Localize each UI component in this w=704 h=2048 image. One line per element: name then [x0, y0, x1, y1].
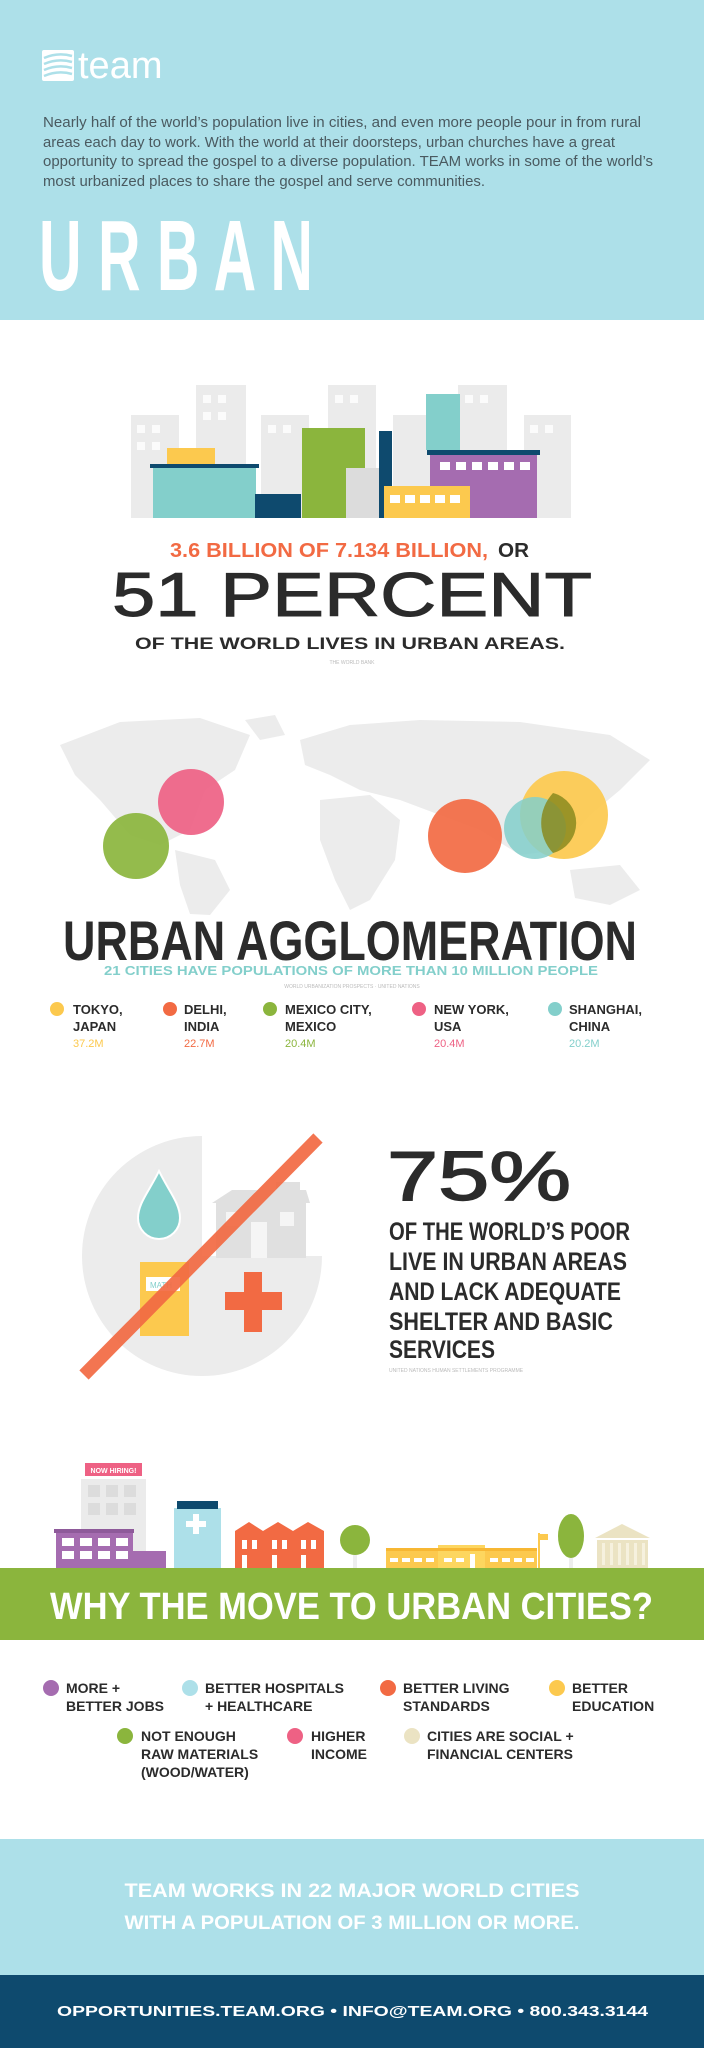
legend: largest cities: 20.4M	[434, 1038, 465, 1050]
legend: largest cities: TOKYO,	[73, 1002, 123, 1017]
footer contact	[0, 1975, 704, 2048]
slash	[84, 1138, 318, 1375]
icon: medical cross	[225, 1272, 282, 1332]
stat: 75 percent: AND LACK ADEQUATE	[389, 1278, 621, 1306]
stat: 75 percent: UNITED NATIONS HUMAN SETTLEMENTS PROGRAMME	[389, 1368, 524, 1374]
icon: book: MATH	[150, 1281, 172, 1290]
legend: reasons: RAW MATERIALS	[141, 1746, 258, 1762]
hospital	[174, 1508, 221, 1568]
legend: reasons: BETTER LIVING	[403, 1680, 510, 1696]
legend: reasons: HIGHER	[311, 1728, 365, 1744]
sign: now hiring	[85, 1463, 142, 1476]
houses	[235, 1522, 324, 1568]
legend: largest cities: USA	[434, 1019, 462, 1034]
stat: 3.6 billion headline	[112, 540, 592, 666]
legend: reasons: STANDARDS	[403, 1698, 490, 1714]
legend: reasons: BETTER JOBS	[66, 1698, 164, 1714]
icon: water drop	[138, 1171, 180, 1239]
stat: 75 percent: LIVE IN URBAN AREAS	[389, 1248, 627, 1276]
legend: largest cities: MEXICO CITY,	[285, 1002, 372, 1017]
footer contact: OPPORTUNITIES.TEAM.ORG • INFO@TEAM.ORG • 800.343.3144	[57, 2003, 649, 2020]
stat: 75 percent: 75%	[387, 1137, 571, 1215]
stat: 75 percent: SHELTER AND BASIC	[389, 1308, 613, 1336]
logo: team	[78, 45, 162, 87]
world map with city circles	[60, 715, 650, 915]
stat: 3.6 billion headline: 3.6 BILLION OF 7.134 BILLION,	[170, 540, 488, 562]
legend: largest cities: SHANGHAI,	[569, 1002, 642, 1017]
heading: urban agglomeration: 21 CITIES HAVE POPULATIONS OF MORE THAN 10 MILLION PEOPLE	[104, 963, 598, 978]
callout band	[0, 1839, 704, 1975]
intro paragraph	[43, 115, 653, 190]
title URBAN: U R B A N	[39, 200, 313, 312]
legend: reasons: MORE +	[66, 1680, 120, 1696]
legend: reasons	[43, 1680, 654, 1780]
stat: 75 percent: SERVICES	[389, 1336, 495, 1364]
icon: book	[140, 1262, 189, 1336]
intro paragraph: areas each day to work. With the world at their doorsteps, urban churches have a great	[43, 135, 615, 151]
legend: reasons: BETTER HOSPITALS	[205, 1680, 344, 1696]
stat: 75 percent	[387, 1137, 630, 1374]
legend: reasons: NOT ENOUGH	[141, 1728, 236, 1744]
callout band: WITH A POPULATION OF 3 MILLION OR MORE.	[124, 1913, 580, 1934]
icon: house	[212, 1182, 310, 1258]
legend: largest cities: DELHI,	[184, 1002, 227, 1017]
legend: largest cities: INDIA	[184, 1019, 220, 1034]
legend: reasons: FINANCIAL CENTERS	[427, 1746, 573, 1762]
header panel	[0, 0, 704, 320]
stat: 3.6 billion headline: OF THE WORLD LIVES IN URBAN AREAS.	[135, 634, 565, 653]
big stat 51 percent: 51 PERCENT	[112, 561, 592, 630]
legend: reasons: BETTER	[572, 1680, 628, 1696]
legend: reasons: (WOOD/WATER)	[141, 1764, 249, 1780]
heading: urban agglomeration: WORLD URBANIZATION PROSPECTS · UNITED NATIONS	[284, 984, 420, 990]
legend: reasons: CITIES ARE SOCIAL +	[427, 1728, 574, 1744]
stat: 75 percent: OF THE WORLD’S POOR	[389, 1218, 630, 1246]
skyline illustration	[131, 385, 571, 518]
banner: why the move: WHY THE MOVE TO URBAN CITIES?	[50, 1586, 653, 1628]
legend: largest cities: CHINA	[569, 1019, 611, 1034]
legend: largest cities: 22.7M	[184, 1038, 215, 1050]
legend: largest cities: JAPAN	[73, 1019, 116, 1034]
bank	[595, 1524, 650, 1568]
legend: largest cities: MEXICO	[285, 1019, 336, 1034]
legend: reasons: INCOME	[311, 1746, 367, 1762]
tree 2	[558, 1514, 584, 1568]
illustration: lack of services	[82, 1130, 332, 1376]
legend: largest cities: 20.4M	[285, 1038, 316, 1050]
legend: largest cities: NEW YORK,	[434, 1002, 509, 1017]
illustration: town skyline	[54, 1463, 650, 1568]
school	[386, 1533, 548, 1568]
tree	[340, 1525, 370, 1568]
legend: reasons: + HEALTHCARE	[205, 1698, 312, 1714]
legend: reasons: EDUCATION	[572, 1698, 654, 1714]
banner: why the move	[0, 1568, 704, 1640]
callout band: TEAM WORKS IN 22 MAJOR WORLD CITIES	[124, 1881, 580, 1902]
stat: 3.6 billion headline: OR	[498, 540, 530, 562]
intro paragraph: opportunity to spread the gospel to a diverse population. TEAM works in some of the world’s	[43, 154, 653, 170]
intro paragraph: most urbanized places to share the gospel and serve communities.	[43, 174, 485, 190]
intro paragraph: Nearly half of the world’s population live in cities, and even more people pour in from rural	[43, 115, 641, 131]
legend: largest cities: 37.2M	[73, 1038, 104, 1050]
legend: largest cities: 20.2M	[569, 1038, 600, 1050]
legend: largest cities	[50, 1002, 642, 1050]
sign: now hiring: NOW HIRING!	[91, 1468, 136, 1475]
stat: 3.6 billion headline: THE WORLD BANK	[329, 660, 375, 666]
